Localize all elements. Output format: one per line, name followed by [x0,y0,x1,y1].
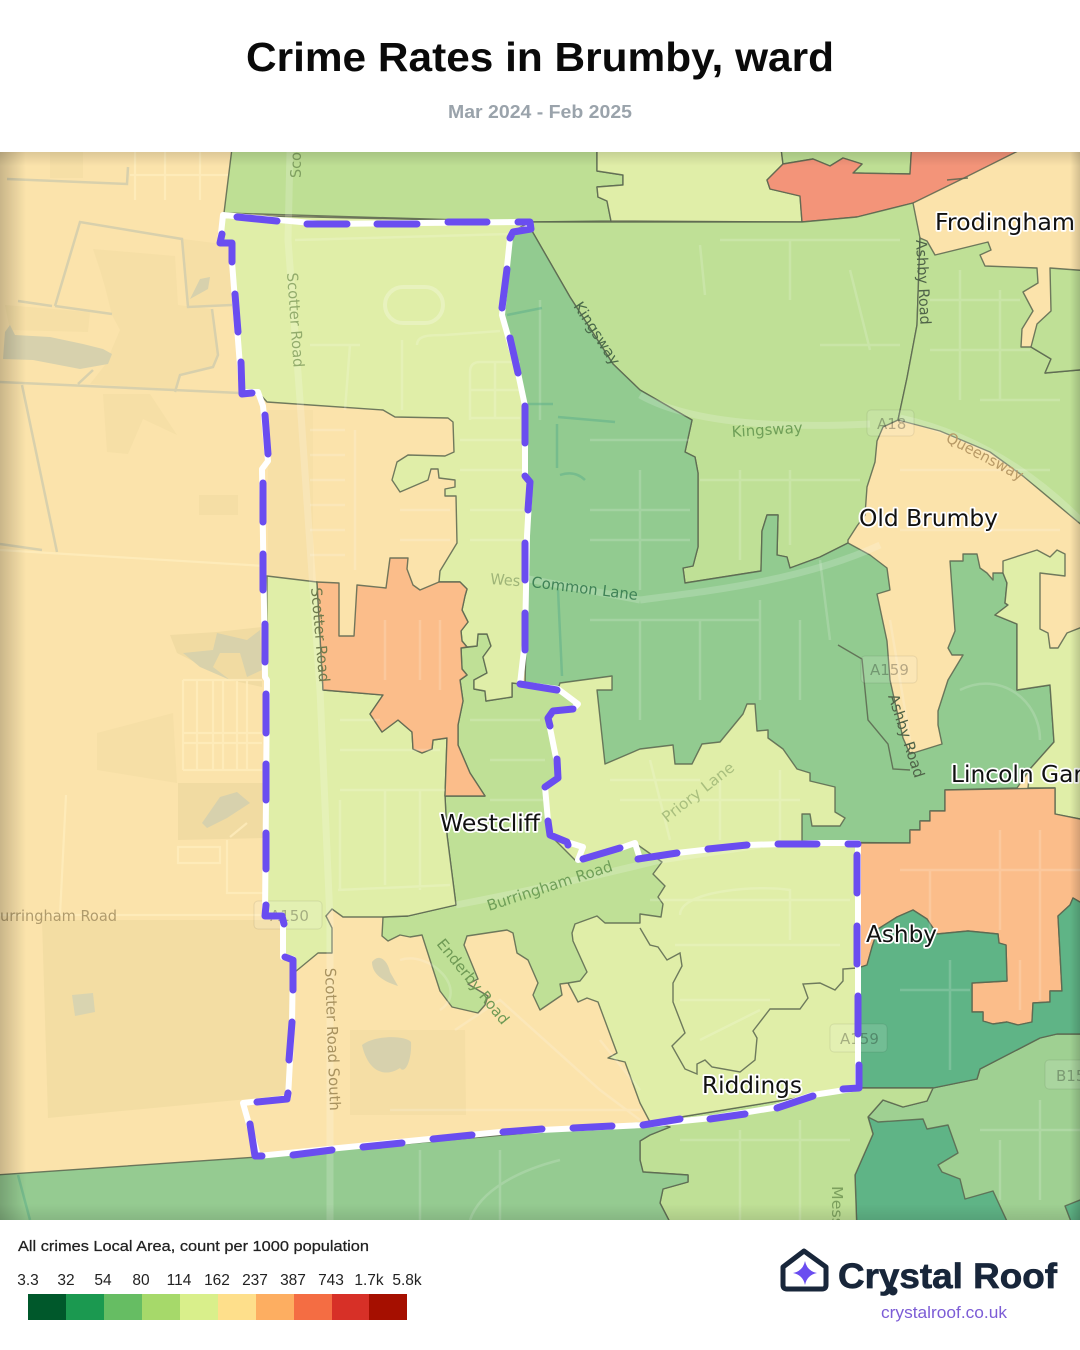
region: Ashby dark green [858,898,1080,1088]
map base: yellow crime band [0,152,1080,1220]
region: ward south-west pale [265,576,456,972]
legend scale values: 387 [280,1272,306,1289]
region: ward north pale [220,215,530,701]
road labels: Wes [490,570,521,590]
legend scale values: 1.7k [354,1272,384,1289]
road labels: Ashby Road [884,692,928,780]
west farmland and water features [0,152,466,1118]
map edge shading [0,152,1080,1220]
legend [17,1238,422,1320]
legend scale values: 5.8k [392,1272,422,1289]
wordmark: Crystal Roof [838,1257,1057,1296]
place label: Riddings: Riddings [702,1073,802,1099]
region: red high crime [767,140,1040,222]
region: Frodingham north green [780,140,912,174]
legend title: All crimes Local Area, count per 1000 population [18,1238,369,1255]
place label: Frodingham: Frodingham [935,210,1075,236]
region: south light green [640,1088,933,1232]
icon: house with star [783,1251,826,1289]
legend scale values [17,1272,422,1289]
road labels: Queensway [943,429,1027,484]
region: south dark green [855,1117,1012,1232]
internal boundaries: Riddings and Ashby Road [640,178,968,1074]
place label: Westcliff: Westcliff [440,811,541,837]
legend colour bar [28,1294,407,1320]
road labels: Kingsway [570,298,624,369]
legend scale values: 3.3 [17,1272,39,1289]
region: north green [224,140,623,222]
road labels: Priory Lane [658,758,738,826]
road labels: Mess [828,1186,846,1226]
place label: Old Brumby: Old Brumby [859,506,998,532]
shield: A450 [254,901,322,929]
shield: A159 south [830,1024,887,1052]
wordmark keyhole dot [888,1286,898,1296]
shield: A450: A150 [270,907,309,925]
legend scale values: 162 [204,1272,230,1289]
shield: A18 [867,410,914,436]
shield: A18: A18 [877,415,906,433]
region: far south-east dark green [1065,1196,1080,1232]
place label: Lincoln Gardens clipped: Lincoln Gar [951,762,1080,788]
road labels: Kingsway [731,419,803,441]
region: Ashby orange [858,788,1080,1025]
road labels [0,152,1027,1226]
legend scale values: 54 [94,1272,112,1289]
shield: A159 north [861,656,917,683]
shield: A159 south: A159 [840,1030,879,1048]
road labels: Scotter Road [307,587,333,683]
shield: B15 [1045,1060,1080,1089]
ward boundary: white outline and purple dashes [220,215,859,1156]
road labels: Burringham Road [485,857,615,915]
legend scale values: 743 [318,1272,344,1289]
place label: Ashby: Ashby [866,922,937,948]
legend scale values: 80 [132,1272,150,1289]
region: south-east mid green [855,1034,1080,1232]
region: far east green [1031,268,1080,373]
road labels: Enderby Road [433,935,513,1028]
logo: Crystal Roof [783,1251,1057,1296]
road labels: Scotter Road [283,272,308,368]
region: east pale [995,550,1080,821]
region: Westcliff light green [382,634,665,1013]
region: east green [898,238,1080,532]
shield: A159 north: A159 [870,661,909,679]
legend scale values: 114 [167,1272,192,1289]
region: central mid green [502,231,1054,843]
region: ward central orange [317,558,485,796]
road labels: urringham Road [0,907,117,925]
region: south-west mid green band [0,1122,688,1232]
title: Crime Rates in Brumby, ward [246,34,834,80]
street network [265,152,1080,1220]
subtitle: date range: Mar 2024 - Feb 2025 [448,101,632,122]
region: north pale [597,140,802,222]
road labels: Common Lane [531,573,639,604]
road labels: Sco [287,152,305,178]
streams in mid green [18,308,615,1220]
legend scale values: 237 [242,1272,268,1289]
road labels: Ashby Road [912,239,934,325]
road labels: Scotter Road South [321,968,344,1111]
region: Kingsway green [532,203,920,583]
website url: crystalroof.co.uk [881,1304,1008,1322]
region: Priory and Riddings pale [540,676,858,1122]
legend scale values: 32 [57,1272,75,1289]
